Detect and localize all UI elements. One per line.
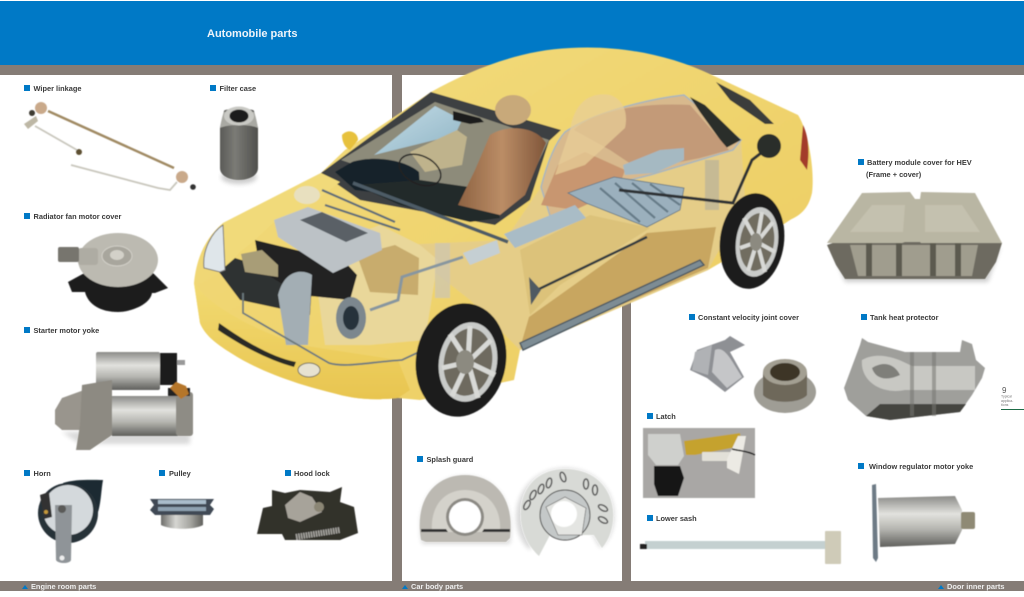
- rear wheel: [714, 189, 790, 293]
- panel: engine room parts: [0, 75, 392, 581]
- icon: splash guard slotted: [516, 468, 614, 556]
- rear strut: [705, 160, 719, 210]
- page number: tions: [1001, 403, 1009, 407]
- fuel filler hose: [619, 150, 765, 203]
- fog lamp: [298, 363, 320, 377]
- car illustration: [194, 47, 813, 424]
- grille: [219, 258, 312, 315]
- transparent engine bay: [312, 225, 438, 345]
- battery box: [357, 245, 419, 295]
- passenger seat: [541, 152, 625, 210]
- rear muffler: [623, 148, 684, 175]
- label: latch: [647, 412, 676, 421]
- steering wheel: [394, 148, 446, 192]
- exhaust manifold: [278, 272, 312, 345]
- icon: radiator fan motor cover: [58, 233, 168, 312]
- air box: [241, 250, 278, 277]
- floor: [520, 227, 716, 348]
- floor highlight: [520, 215, 650, 315]
- label: tank heat protector: Tank heat protector: [870, 313, 939, 322]
- rear floor heat shield: [568, 177, 684, 227]
- panel: car body parts: [402, 75, 622, 581]
- side mirror: [342, 131, 358, 150]
- label: starter motor yoke: Starter motor yoke: [34, 326, 99, 335]
- icon: window regulator motor yoke: [872, 484, 975, 562]
- label: pulley: Pulley: [169, 469, 192, 478]
- icon: lower sash: [640, 531, 841, 564]
- icon: wiper linkage: [24, 102, 196, 190]
- icon: battery module cover: [827, 192, 1002, 282]
- headlight: [204, 225, 225, 272]
- engine block lower: [255, 240, 357, 300]
- label: constant velocity joint cover: Constant velocity joint cover: [698, 313, 799, 322]
- header banner: [0, 1, 1024, 65]
- label: battery module cover: [858, 158, 972, 179]
- front wheel: [407, 296, 515, 424]
- page number: applica-: [1001, 399, 1014, 403]
- center console: [355, 180, 500, 222]
- icon: filter case: [220, 106, 258, 184]
- label: filter case: Filter case: [220, 84, 256, 93]
- photo: latch: [643, 428, 755, 498]
- wiper linkage in car: [322, 190, 400, 230]
- footer: engine room parts: Engine room parts: [31, 582, 96, 591]
- footer: car body parts: Car body parts: [411, 582, 463, 591]
- icon: starter motor yoke: [55, 352, 193, 450]
- filler neck: [757, 134, 781, 158]
- car body: [194, 47, 813, 400]
- rear pillar: [690, 97, 741, 148]
- label: pulley: [159, 469, 192, 478]
- front strut: [435, 243, 450, 298]
- sub frame bracket: [529, 277, 541, 305]
- label: splash guard: Splash guard: [426, 455, 474, 464]
- label: latch: Latch: [656, 412, 676, 421]
- side windows: [541, 95, 741, 222]
- catalytic converter: [463, 240, 500, 265]
- page number: 9: [1002, 386, 1007, 395]
- mid muffler: [504, 205, 586, 248]
- brake line: [243, 293, 419, 365]
- steering rod: [353, 183, 508, 242]
- hood: [222, 173, 340, 272]
- footer: door inner parts: Door inner parts: [947, 582, 1004, 591]
- label: horn: [24, 469, 51, 478]
- rear quarter window strip: [716, 82, 774, 124]
- shield ribs: [600, 183, 680, 222]
- rear seats: [574, 104, 729, 170]
- transparent door and cabin lower: [400, 140, 745, 350]
- icon: cv joint shield: [690, 336, 745, 392]
- passenger seat headrest: [555, 94, 626, 175]
- icon: horn: [38, 480, 103, 563]
- headrest: [495, 95, 531, 125]
- windshield frame: [321, 92, 561, 225]
- panel: door inner parts: [631, 75, 1024, 581]
- label: wiper linkage: Wiper linkage: [34, 84, 82, 93]
- label: hood lock: Hood lock: [294, 469, 331, 478]
- label: horn: Horn: [34, 469, 51, 478]
- label: lower sash: Lower sash: [656, 514, 697, 523]
- exhaust pipe: [370, 257, 463, 310]
- interior through windshield: [341, 102, 549, 205]
- tail light: [800, 125, 808, 170]
- label: radiator fan motor cover: Radiator fan motor cover: [34, 212, 122, 221]
- front seat: [458, 128, 546, 215]
- crossmember: [537, 237, 647, 290]
- turbo disc: [336, 297, 366, 339]
- turbo centre: [343, 306, 359, 330]
- front bumper: [194, 283, 410, 399]
- title: Automobile parts: [207, 28, 297, 40]
- label: window regulator motor yoke: Window regulator motor yoke: [869, 462, 973, 471]
- icon: cv joint hub: [754, 359, 816, 413]
- icon: pulley: [150, 499, 214, 529]
- engine head: [274, 207, 382, 273]
- icon: tank heat protector: [844, 338, 985, 420]
- side sill: [520, 260, 704, 350]
- page number: Typical: [1001, 394, 1012, 398]
- rearview mirror: [453, 111, 484, 124]
- bumper intake: [218, 323, 296, 367]
- dashboard: [335, 159, 420, 195]
- page number: [1001, 386, 1024, 410]
- windshield glass: [374, 106, 462, 155]
- coolant tank: [294, 186, 320, 204]
- icon: splash guard plain: [420, 475, 511, 544]
- engine cover ribs: [300, 212, 368, 242]
- label: battery module cover: (Frame + cover): [866, 170, 922, 179]
- dash through glass: [410, 130, 467, 172]
- label: battery module cover: Battery module cover for HEV: [867, 158, 972, 167]
- icon: hood lock: [257, 487, 358, 540]
